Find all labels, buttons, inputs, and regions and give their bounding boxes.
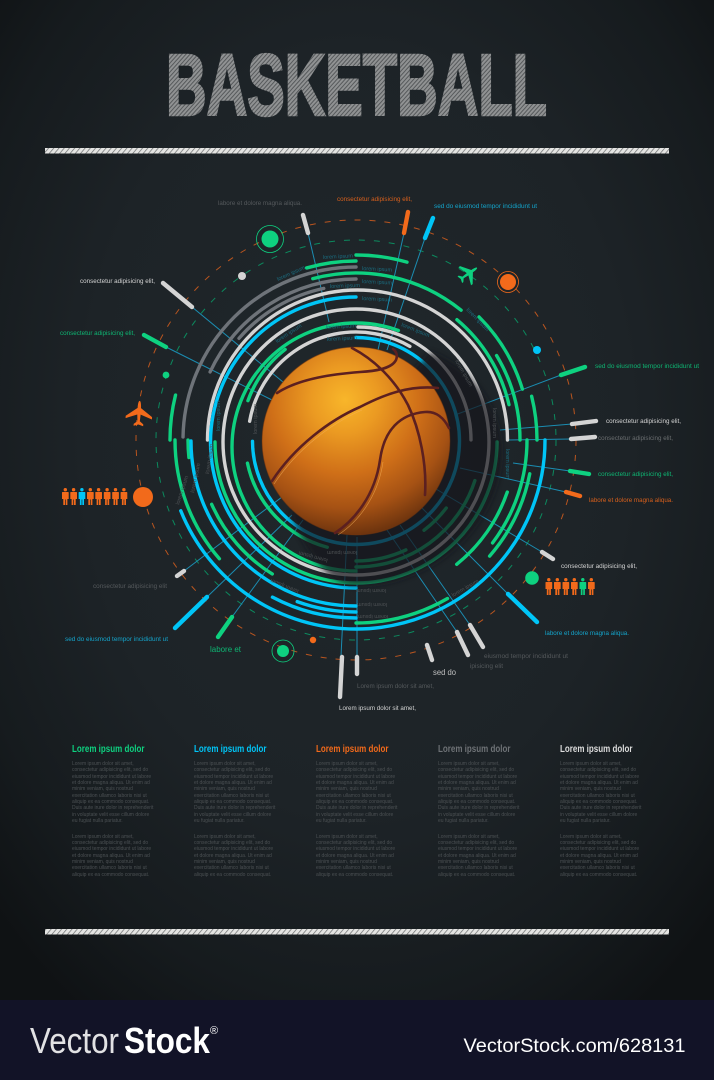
text column: white (560, 744, 642, 878)
text column: green: exercitation ullamco laboris nisi ut (72, 793, 147, 799)
ring mini labels: lorem ipsum (362, 266, 393, 274)
text column: green: consectetur adipisicing elit, sed do (72, 767, 148, 773)
text column: gray: eiusmod tempor incididunt ut labore (438, 846, 517, 852)
connector sticks (144, 212, 596, 697)
text column: white: consectetur adipisicing elit, sed do (560, 840, 636, 846)
text column: blue: eiusmod tempor incididunt ut labore (194, 774, 273, 780)
icon: green target dot bottom (272, 640, 294, 662)
text column: white: exercitation ullamco laboris nisi ut (560, 865, 635, 871)
text column: white: minim veniam, quis nostrud (560, 786, 621, 792)
text column: white: eiusmod tempor incididunt ut labore (560, 774, 639, 780)
ring mini labels: lorem ipsum (205, 443, 215, 474)
external labels: consectetur adipisicing elit, (337, 197, 412, 203)
text column: blue: consectetur adipisicing elit, sed do (194, 767, 270, 773)
external labels: consectetur adipisicing elit, (606, 419, 681, 425)
text column: orange: exercitation ullamco laboris nisi ut (316, 865, 391, 871)
ring mini labels: lorem ipsum (504, 449, 510, 479)
text column: white: eiusmod tempor incididunt ut labore (560, 846, 639, 852)
text column: green: consectetur adipisicing elit, sed do (72, 840, 148, 846)
text column: blue: Duis aute irure dolor in reprehenderit (194, 805, 275, 811)
text column: blue: et dolore magna aliqua. Ut enim ad (194, 780, 272, 786)
ring mini labels (175, 253, 510, 619)
text column: white: exercitation ullamco laboris nisi ut (560, 793, 635, 799)
external labels: sed do (433, 668, 457, 677)
text column: white: minim veniam, quis nostrud (560, 859, 621, 865)
footer bar: Stock (124, 1020, 211, 1061)
text column: white: et dolore magna aliqua. Ut enim ad (560, 780, 638, 786)
ring mini labels: lorem ipsum (298, 549, 329, 563)
text column: orange: aliquip ex ea commodo consequat. (316, 872, 393, 878)
ring mini labels: lorem ipsum (330, 283, 360, 290)
ring mini labels: lorem ipsum (327, 549, 357, 555)
text column: gray: Lorem ipsum dolor sit amet, (438, 761, 500, 767)
external labels: consectetur adipisicing elit, (80, 279, 155, 285)
text column: white: in voluptate velit esse cillum dolore (560, 812, 637, 818)
text column: white: eu fugiat nulla pariatur. (560, 818, 611, 824)
text column: gray: consectetur adipisicing elit, sed do (438, 840, 514, 846)
text column: blue: in voluptate velit esse cillum dolore (194, 812, 271, 818)
text column: orange: consectetur adipisicing elit, sed do (316, 840, 392, 846)
text column: blue: eiusmod tempor incididunt ut labore (194, 846, 273, 852)
text column: blue: et dolore magna aliqua. Ut enim ad (194, 853, 272, 859)
text column: orange: eiusmod tempor incididunt ut labore (316, 774, 395, 780)
text column: orange: Lorem ipsum dolor (316, 744, 388, 755)
external labels: consectetur adipisicing elit, (60, 331, 135, 337)
external labels: labore et (210, 645, 242, 654)
text column: gray: aliquip ex ea commodo consequat. (438, 872, 515, 878)
ring mini labels: lorem ipsum (362, 296, 393, 304)
ring mini labels: lorem ipsum (362, 279, 393, 287)
icon: green target dot top (256, 226, 284, 252)
text column: blue: exercitation ullamco laboris nisi ut (194, 865, 269, 871)
text column: white: Lorem ipsum dolor sit amet, (560, 834, 622, 840)
external labels: labore et dolore magna aliqua. (545, 631, 629, 637)
outer blue and green arcs above shadow (106, 190, 606, 690)
text column: gray: Lorem ipsum dolor sit amet, (438, 834, 500, 840)
text column: green: exercitation ullamco laboris nisi ut (72, 865, 147, 871)
ring mini labels: lorem ipsum (491, 408, 497, 438)
text column: gray: aliquip ex ea commodo consequat. (438, 799, 515, 805)
ring mini labels: lorem ipsum (451, 578, 480, 599)
ring mini labels: lorem ipsum (358, 613, 388, 619)
text column: white: Lorem ipsum dolor (560, 744, 632, 755)
external labels: eiusmod tempor incididunt ut (484, 654, 568, 660)
footer bar: ® (210, 1025, 218, 1037)
external labels: labore et dolore magna aliqua. (589, 498, 673, 504)
external labels: sed do eiusmod tempor incididunt ut (434, 204, 537, 210)
text column: gray: exercitation ullamco laboris nisi ut (438, 793, 513, 799)
external labels: consectetur adipisicing elit, (598, 472, 673, 478)
people row left (62, 488, 127, 505)
text column: orange: in voluptate velit esse cillum dolore (316, 812, 393, 818)
text column: gray: in voluptate velit esse cillum dolore (438, 812, 515, 818)
external labels: ipisicing elit (470, 664, 503, 670)
external labels (60, 197, 699, 712)
icon: orange plane (125, 400, 153, 427)
ring mini labels: lorem ipsum (190, 462, 202, 493)
text column: blue (194, 744, 276, 878)
ball cast shadow (290, 352, 501, 586)
text column: orange: consectetur adipisicing elit, sed do (316, 767, 392, 773)
text column: green: minim veniam, quis nostrud (72, 786, 133, 792)
text column: gray: Duis aute irure dolor in reprehenderit (438, 805, 519, 811)
ring mini labels: lorem ipsum (276, 265, 307, 283)
text column: orange: aliquip ex ea commodo consequat. (316, 799, 393, 805)
text column: orange: et dolore magna aliqua. Ut enim ad (316, 853, 394, 859)
text column: orange: minim veniam, quis nostrud (316, 786, 377, 792)
text column: blue: Lorem ipsum dolor sit amet, (194, 834, 256, 840)
text column: white: aliquip ex ea commodo consequat. (560, 872, 637, 878)
ring mini labels: lorem ipsum (323, 253, 353, 261)
text column: orange: Duis aute irure dolor in reprehenderit (316, 805, 397, 811)
ring mini labels: lorem ipsum (326, 323, 356, 331)
footer bar: VectorStock.com/628131 (464, 1035, 686, 1057)
external labels: sed do eiusmod tempor incididunt ut (595, 364, 699, 370)
text column: green: eu fugiat nulla pariatur. (72, 818, 123, 824)
radial connector lines (166, 233, 572, 657)
text column: orange: eiusmod tempor incididunt ut labore (316, 846, 395, 852)
ring mini labels: lorem ipsum (253, 404, 259, 434)
text column: orange: Lorem ipsum dolor sit amet, (316, 761, 378, 767)
external labels: Lorem ipsum dolor sit amet, (339, 706, 416, 712)
external labels: consectetur adipisicing elit (93, 584, 167, 590)
text column: gray (438, 744, 520, 878)
text column: green: Lorem ipsum dolor sit amet, (72, 761, 134, 767)
text column: gray: consectetur adipisicing elit, sed do (438, 767, 514, 773)
ring mini labels: lorem ipsum (400, 322, 431, 339)
text column: green: eiusmod tempor incididunt ut labore (72, 846, 151, 852)
text column: gray: Lorem ipsum dolor (438, 744, 510, 755)
text column: orange: minim veniam, quis nostrud (316, 859, 377, 865)
text column: blue: Lorem ipsum dolor (194, 744, 266, 755)
ring mini labels: lorem ipsum (216, 401, 222, 431)
text column: orange: eu fugiat nulla pariatur. (316, 818, 367, 824)
ring mini labels: lorem ipsum (327, 335, 357, 343)
icon: orange target dot (498, 272, 518, 292)
text column: gray: et dolore magna aliqua. Ut enim ad (438, 780, 516, 786)
text column: gray: et dolore magna aliqua. Ut enim ad (438, 853, 516, 859)
external labels: consectetur adipisicing elit, (598, 436, 673, 442)
concentric progress rings (101, 185, 611, 695)
text column: white: Lorem ipsum dolor sit amet, (560, 761, 622, 767)
icon: green plane (453, 259, 483, 289)
text column: blue: exercitation ullamco laboris nisi ut (194, 793, 269, 799)
text column: green: aliquip ex ea commodo consequat. (72, 799, 149, 805)
text column: green: in voluptate velit esse cillum dolore (72, 812, 149, 818)
bottom chalk line (45, 929, 669, 934)
text column: green: et dolore magna aliqua. Ut enim ad (72, 853, 150, 859)
external labels: Lorem ipsum dolor sit amet, (357, 684, 434, 690)
ring mini labels: lorem ipsum (175, 475, 190, 506)
text column: blue: consectetur adipisicing elit, sed do (194, 840, 270, 846)
text column: blue: Lorem ipsum dolor sit amet, (194, 761, 256, 767)
ring mini labels: lorem ipsum (275, 323, 304, 345)
text column: green: eiusmod tempor incididunt ut labore (72, 774, 151, 780)
text column: white: et dolore magna aliqua. Ut enim ad (560, 853, 638, 859)
dashed orbit rings (136, 220, 576, 660)
marker dots (133, 272, 541, 643)
text column: green: et dolore magna aliqua. Ut enim ad (72, 780, 150, 786)
basketball (262, 347, 450, 535)
text column: green: minim veniam, quis nostrud (72, 859, 133, 865)
text column: orange (316, 744, 398, 878)
text column: orange: exercitation ullamco laboris nisi ut (316, 793, 391, 799)
ring mini labels: lorem ipsum (453, 359, 474, 388)
text column: blue: minim veniam, quis nostrud (194, 859, 255, 865)
top chalk line (45, 148, 669, 154)
text column: gray: minim veniam, quis nostrud (438, 786, 499, 792)
text column: orange: Lorem ipsum dolor sit amet, (316, 834, 378, 840)
text column: blue: minim veniam, quis nostrud (194, 786, 255, 792)
text column: white: Duis aute irure dolor in reprehenderit (560, 805, 641, 811)
text column: green: aliquip ex ea commodo consequat. (72, 872, 149, 878)
text column: white: consectetur adipisicing elit, sed do (560, 767, 636, 773)
external labels: sed do eiusmod tempor incididunt ut (65, 637, 168, 643)
footer bar (0, 1000, 714, 1080)
footer bar: Vector (30, 1020, 119, 1061)
text column: gray: eu fugiat nulla pariatur. (438, 818, 489, 824)
text column: green: Lorem ipsum dolor sit amet, (72, 834, 134, 840)
ring mini labels: lorem ipsum (269, 577, 300, 594)
text column: green: Duis aute irure dolor in reprehenderit (72, 805, 153, 811)
text column: blue: eu fugiat nulla pariatur. (194, 818, 245, 824)
ring mini labels: lorem ipsum (357, 601, 387, 607)
people row right (546, 578, 595, 595)
ring mini labels: lorem ipsum (356, 587, 386, 593)
text column: gray: eiusmod tempor incididunt ut labore (438, 774, 517, 780)
text column: blue: aliquip ex ea commodo consequat. (194, 872, 271, 878)
text column: orange: et dolore magna aliqua. Ut enim ad (316, 780, 394, 786)
ring mini labels: lorem ipsum (465, 307, 490, 333)
text column: green: Lorem ipsum dolor (72, 744, 144, 755)
text column: gray: minim veniam, quis nostrud (438, 859, 499, 865)
external labels: consectetur adipisicing elit, (561, 564, 637, 570)
text column: gray: exercitation ullamco laboris nisi ut (438, 865, 513, 871)
text column: white: aliquip ex ea commodo consequat. (560, 799, 637, 805)
text column: blue: aliquip ex ea commodo consequat. (194, 799, 271, 805)
external labels: labore et dolore magna aliqua. (218, 201, 302, 207)
text column: green (72, 744, 154, 878)
